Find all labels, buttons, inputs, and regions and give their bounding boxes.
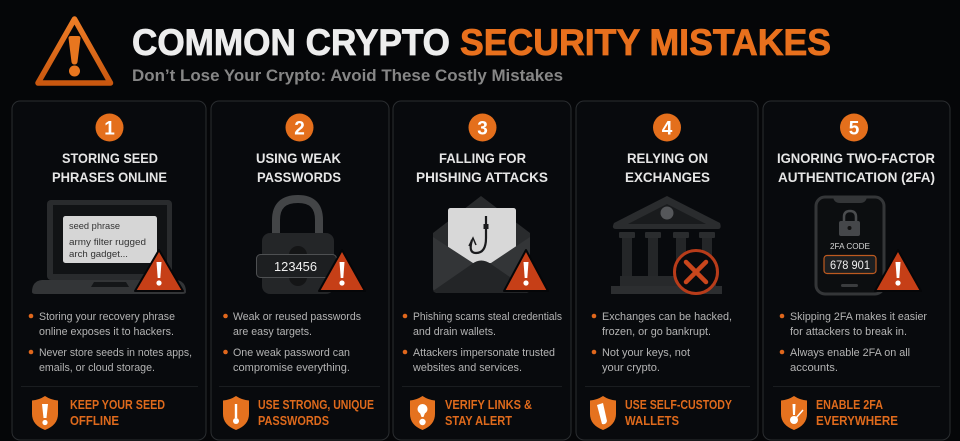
icon: warning triangle bbox=[319, 250, 365, 291]
heading: RELYING ON bbox=[627, 151, 708, 166]
bullet list: compromise everything. bbox=[233, 362, 350, 374]
bullet list: accounts. bbox=[790, 362, 838, 374]
action text: EVERYWHERE bbox=[816, 414, 898, 428]
number badge 1 bbox=[96, 114, 124, 142]
bullet list: frozen, or go bankrupt. bbox=[602, 326, 711, 338]
heading bbox=[416, 151, 548, 185]
heading: IGNORING TWO-FACTOR bbox=[777, 151, 935, 166]
bullet list: Attackers impersonate trusted bbox=[413, 347, 555, 359]
panel: storing seed phrases online bbox=[12, 101, 206, 440]
icon: header warning triangle bbox=[38, 19, 110, 83]
heading: FALLING FOR bbox=[439, 151, 526, 166]
bullet list: Phishing scams steal credentials bbox=[413, 311, 562, 323]
title bbox=[132, 22, 831, 63]
icon: red X circle bbox=[674, 250, 718, 294]
title: COMMON CRYPTO bbox=[132, 22, 450, 63]
number badge 5: 5 bbox=[849, 118, 860, 140]
bullet list: Storing your recovery phrase bbox=[39, 311, 175, 323]
bullet list: Skipping 2FA makes it easier bbox=[790, 311, 927, 323]
panel: using weak passwords bbox=[211, 101, 389, 440]
heading bbox=[52, 151, 167, 185]
panel: falling for phishing attacks bbox=[393, 101, 571, 440]
icon: shield bbox=[781, 396, 807, 430]
action text bbox=[625, 398, 733, 428]
bullet list: are easy targets. bbox=[233, 326, 312, 338]
icon: phone with 2FA code: 2FA CODE bbox=[830, 242, 870, 251]
number badge 3 bbox=[468, 114, 496, 142]
bullet list: Never store seeds in notes apps, bbox=[39, 347, 192, 359]
icon: warning triangle bbox=[875, 250, 921, 291]
number badge 4 bbox=[653, 114, 681, 142]
subtitle: Don’t Lose Your Crypto: Avoid These Costly Mistakes bbox=[132, 66, 563, 85]
heading: EXCHANGES bbox=[625, 170, 710, 185]
icon: envelope with fish hook bbox=[433, 196, 530, 293]
icon: laptop with seed phrase note bbox=[32, 200, 186, 294]
bullet list: websites and services. bbox=[412, 362, 522, 374]
icon: shield bbox=[223, 396, 249, 430]
action text: ENABLE 2FA bbox=[816, 398, 883, 412]
heading bbox=[256, 151, 341, 185]
action text: STAY ALERT bbox=[445, 414, 512, 428]
bullet list: emails, or cloud storage. bbox=[39, 362, 155, 374]
bullet list: Weak or reused passwords bbox=[233, 311, 361, 323]
icon: warning triangle bbox=[504, 250, 548, 291]
heading: STORING SEED bbox=[62, 151, 158, 166]
action text: KEEP YOUR SEED bbox=[70, 398, 165, 412]
icon: warning triangle bbox=[135, 250, 183, 291]
action text: OFFLINE bbox=[70, 414, 119, 428]
panel: ignoring two-factor authentication bbox=[763, 101, 950, 440]
bullet list: online exposes it to hackers. bbox=[39, 326, 174, 338]
icon: shield bbox=[32, 396, 58, 430]
bullet list: One weak password can bbox=[233, 347, 350, 359]
bullet list bbox=[592, 311, 732, 374]
bullet list: for attackers to break in. bbox=[790, 326, 907, 338]
action text bbox=[258, 398, 374, 428]
heading: USING WEAK bbox=[256, 151, 341, 166]
heading bbox=[777, 151, 935, 185]
heading bbox=[625, 151, 710, 185]
number badge 2: 2 bbox=[294, 118, 305, 140]
action text: PASSWORDS bbox=[258, 414, 329, 428]
icon: laptop with seed phrase note: arch gadget... bbox=[69, 249, 128, 260]
bullet list bbox=[223, 311, 361, 374]
bullet list: your crypto. bbox=[602, 362, 660, 374]
icon: bank building bbox=[611, 196, 722, 294]
heading: PASSWORDS bbox=[257, 170, 341, 185]
action text: USE STRONG, UNIQUE bbox=[258, 398, 374, 412]
action text: VERIFY LINKS & bbox=[445, 398, 532, 412]
icon: padlock with weak password bbox=[256, 199, 336, 294]
action text: WALLETS bbox=[625, 414, 679, 428]
bullet list bbox=[29, 311, 192, 374]
action text: USE SELF-CUSTODY bbox=[625, 398, 733, 412]
heading: PHISHING ATTACKS bbox=[416, 170, 548, 185]
number badge 3: 3 bbox=[477, 118, 488, 140]
icon: laptop with seed phrase note: seed phrase bbox=[69, 221, 120, 232]
icon: phone with 2FA code bbox=[816, 197, 884, 294]
bullet list: and drain wallets. bbox=[413, 326, 496, 338]
bullet list bbox=[403, 311, 562, 374]
icon: laptop with seed phrase note: army filter rugged bbox=[69, 237, 146, 248]
bullet list: Exchanges can be hacked, bbox=[602, 311, 732, 323]
number badge 2 bbox=[286, 114, 314, 142]
icon: padlock with weak password: 123456 bbox=[274, 260, 317, 274]
action text bbox=[445, 398, 532, 428]
number badge 5 bbox=[840, 114, 868, 142]
heading: PHRASES ONLINE bbox=[52, 170, 167, 185]
number badge 4: 4 bbox=[662, 118, 673, 140]
bullet list: Always enable 2FA on all bbox=[790, 347, 910, 359]
action text bbox=[70, 398, 165, 428]
icon: shield bbox=[410, 396, 435, 430]
bullet list: Not your keys, not bbox=[602, 347, 691, 359]
bullet list bbox=[780, 311, 927, 374]
title: SECURITY MISTAKES bbox=[460, 22, 831, 63]
panel: relying on exchanges bbox=[576, 101, 758, 440]
action text bbox=[816, 398, 898, 428]
icon: phone with 2FA code: 678 901 bbox=[830, 258, 870, 272]
number badge 1: 1 bbox=[104, 118, 115, 140]
icon: shield bbox=[590, 396, 616, 430]
heading: AUTHENTICATION (2FA) bbox=[778, 170, 935, 185]
